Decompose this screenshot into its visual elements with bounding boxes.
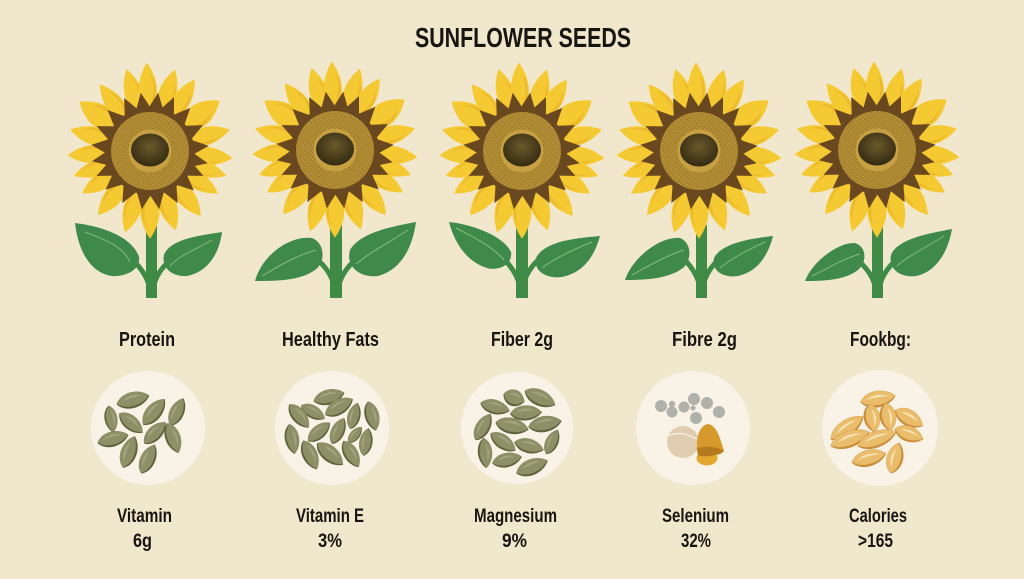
label: Calories: Calories (849, 506, 907, 527)
icon: almond-like seed pile (822, 370, 938, 486)
value: 3%: 3% (318, 531, 342, 552)
title: SUNFLOWER SEEDS (415, 22, 631, 53)
value: >165: >165 (858, 531, 893, 552)
label: Vitamin: Vitamin (117, 506, 172, 527)
label: Vitamin E: Vitamin E (296, 506, 364, 527)
label: Protein: Protein (119, 329, 175, 351)
label: Fibre 2g: Fibre 2g (672, 329, 737, 351)
label: Healthy Fats: Healthy Fats (282, 329, 379, 351)
sunflower 5 (794, 61, 960, 298)
icon: selenium minerals and nut (636, 371, 750, 485)
sunflower 2 (252, 61, 418, 298)
label: Magnesium: Magnesium (474, 506, 557, 527)
icon: seed pile 2 (275, 371, 389, 485)
sunflower 3 (439, 62, 605, 298)
icon: seed pile 1 (91, 371, 205, 485)
sunflower 4 (616, 62, 782, 298)
icon: seed pile 3 (461, 372, 573, 484)
sunflower 1 (67, 62, 233, 298)
label: Fookbg: Fookbg: (850, 329, 911, 351)
value: 6g: 6g (133, 531, 152, 552)
label: Selenium: Selenium (662, 506, 729, 527)
value: 9%: 9% (502, 531, 527, 552)
value: 32%: 32% (681, 531, 711, 552)
label: Fiber 2g: Fiber 2g (491, 329, 553, 351)
